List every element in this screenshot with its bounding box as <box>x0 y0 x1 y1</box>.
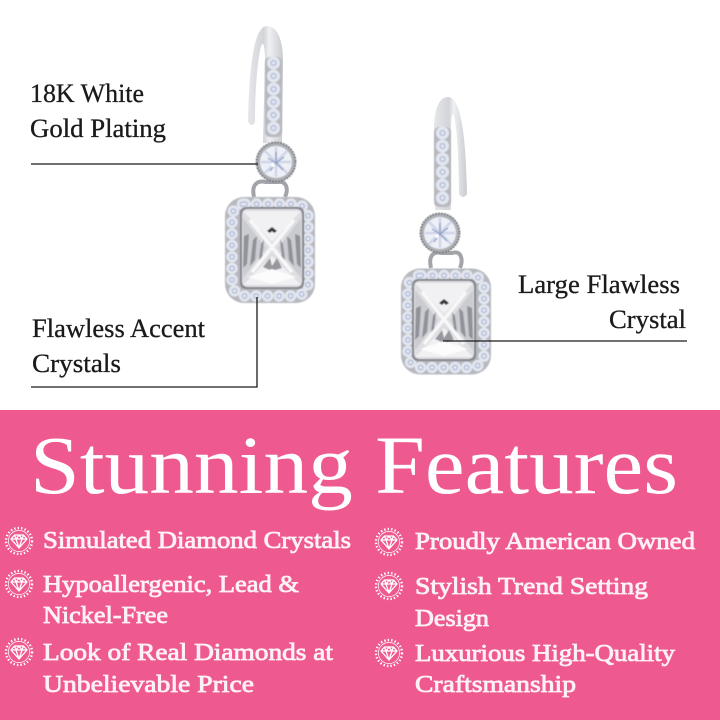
feature: luxurious craftsmanship: Craftsmanship <box>415 671 576 698</box>
feature: look of real diamonds <box>6 639 333 698</box>
center crystal: left earring <box>240 207 304 289</box>
feature: proudly american owned: Proudly American Owned <box>415 528 695 555</box>
feature: hypoallergenic <box>6 571 299 629</box>
callout: flawless accent crystals: Crystals <box>32 349 121 378</box>
callout: flawless accent crystals <box>31 297 257 387</box>
feature: stylish trend setting design <box>376 573 648 632</box>
feature: look of real diamonds: Look of Real Diamonds at <box>43 639 333 666</box>
panel: stunning features <box>0 410 720 720</box>
feature: stylish trend setting design: Stylish Trend Setting <box>415 573 648 600</box>
feature: luxurious craftsmanship <box>376 640 676 698</box>
feature: hypoallergenic: Hypoallergenic, Lead & <box>43 571 299 598</box>
round stone: right earring <box>420 213 460 253</box>
halo: right earring <box>401 268 491 374</box>
earring: left <box>225 26 315 303</box>
feature: hypoallergenic: Nickel-Free <box>43 602 168 629</box>
callout: 18K white gold plating: Gold Plating <box>30 114 166 143</box>
hook: right earring <box>434 97 467 210</box>
crystal strip: left hook <box>265 57 282 137</box>
callout: 18K white gold plating <box>30 79 258 164</box>
heading: Stunning Features <box>30 419 678 511</box>
center crystal: right earring <box>412 279 476 361</box>
bail: right earring <box>430 252 462 268</box>
earring: right <box>401 97 491 374</box>
callout: flawless accent crystals: Flawless Accent <box>32 314 206 343</box>
hook: left earring <box>248 26 283 143</box>
callout: large flawless crystal: Large Flawless <box>518 270 680 299</box>
feature: luxurious craftsmanship: Luxurious High-Quality <box>415 640 676 667</box>
feature: stylish trend setting design: Design <box>415 605 489 632</box>
crystal strip: right hook <box>434 127 451 207</box>
callout: large flawless crystal <box>443 270 687 341</box>
feature: simulated diamond crystals: Simulated Diamond Crystals <box>43 527 351 554</box>
bail: left earring <box>253 182 287 197</box>
round stone: left earring <box>256 142 296 182</box>
callout: 18K white gold plating: 18K White <box>30 79 144 108</box>
halo: left earring <box>225 197 315 303</box>
callout: large flawless crystal: Crystal <box>609 305 686 334</box>
feature: look of real diamonds: Unbelievable Price <box>43 671 254 698</box>
